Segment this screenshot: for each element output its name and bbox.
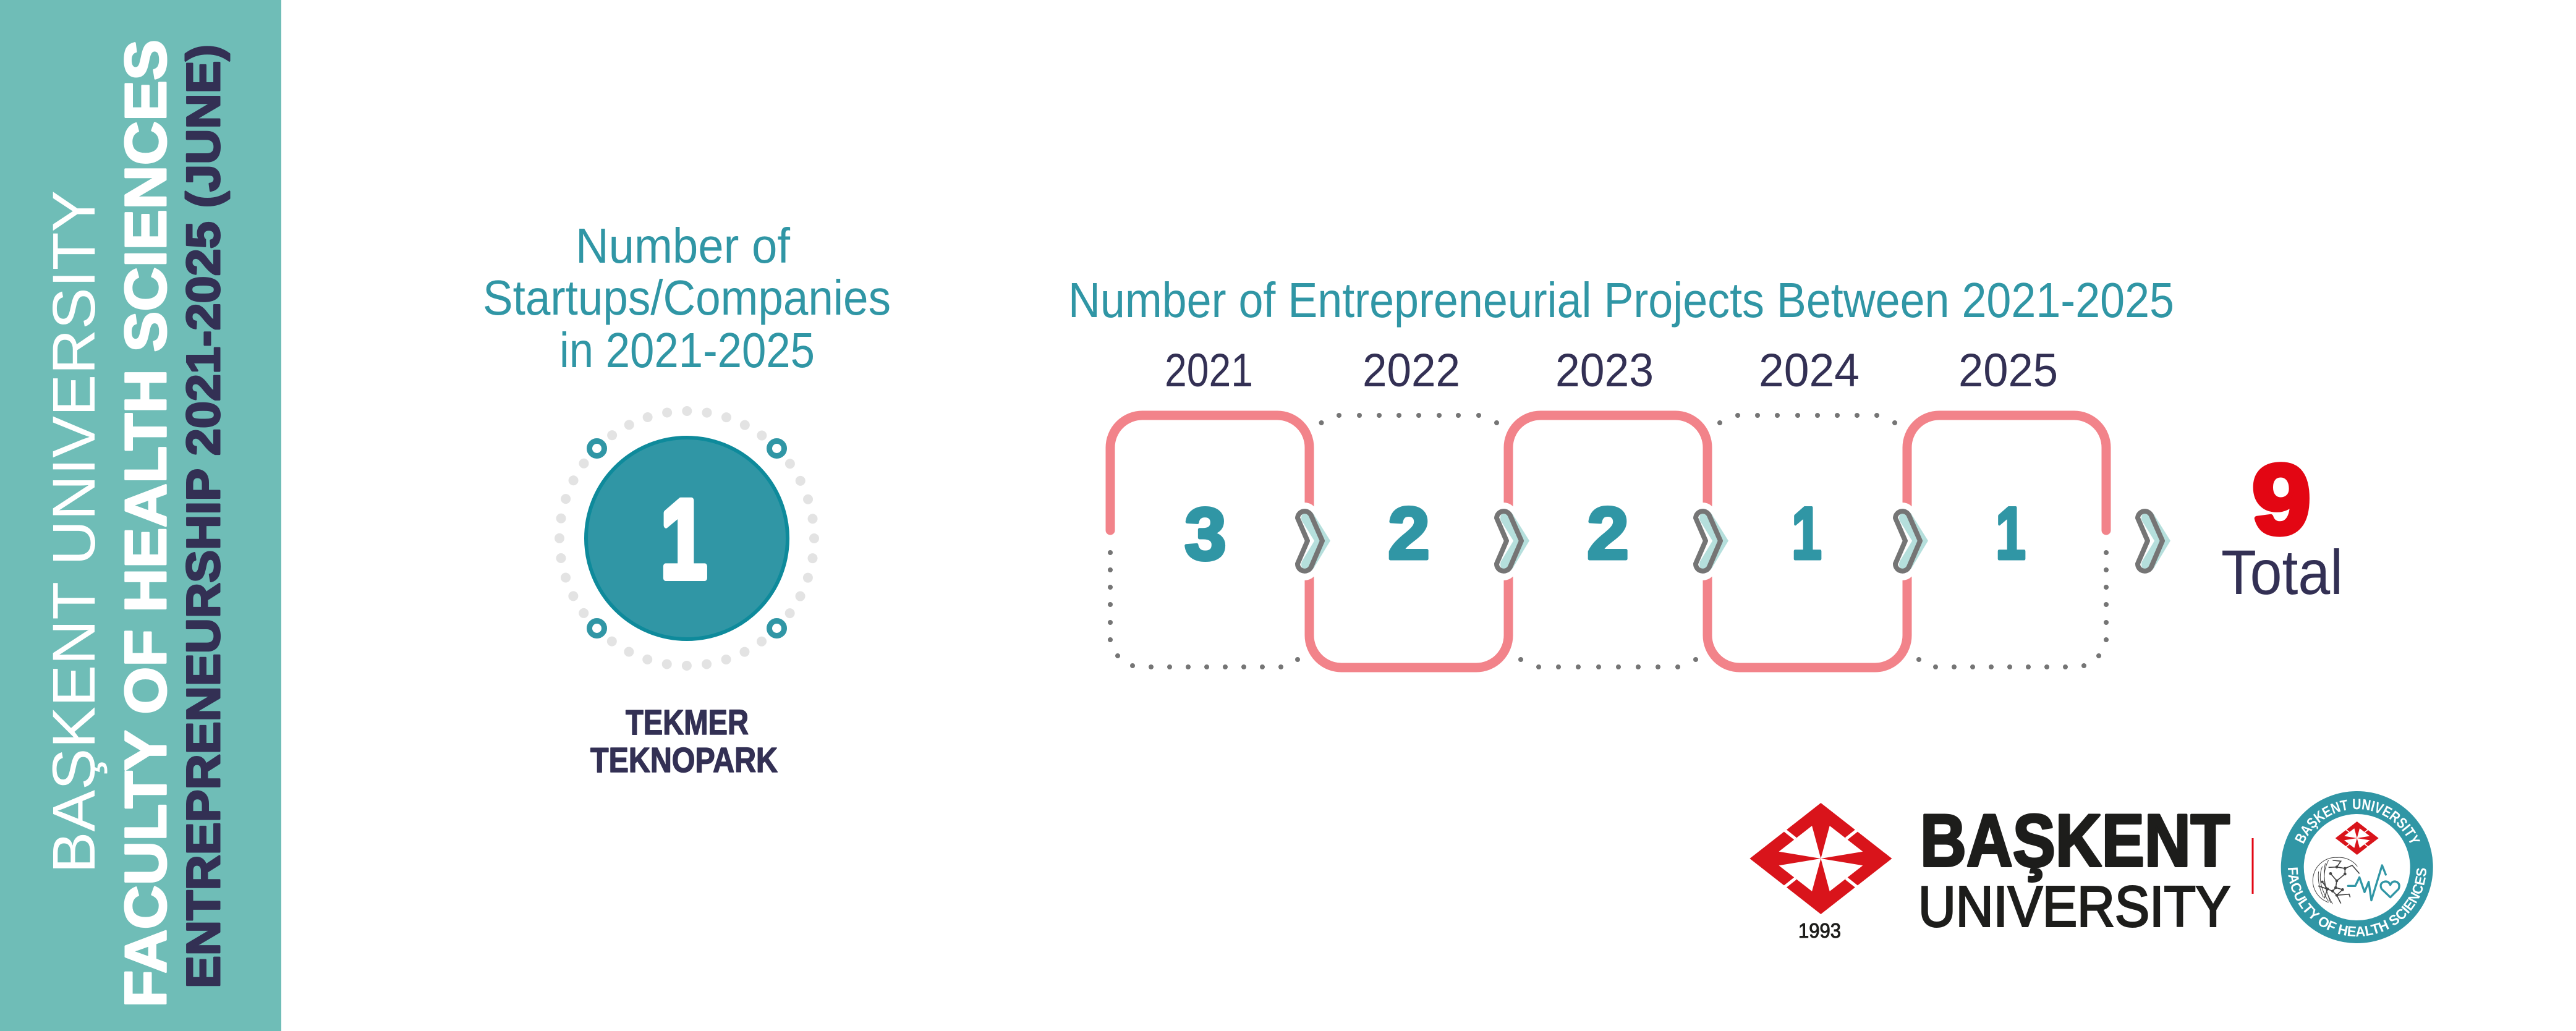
logo wordmark: baskent: BAŞKENT <box>1920 799 2230 882</box>
label: tekmer teknopark: TEKMER <box>626 703 749 742</box>
sidebar title: entrepreneurship: ENTREPRENEURSHIP 2021-2025 (JUNE) <box>177 45 230 988</box>
seal heartbeat and heart <box>2348 865 2399 901</box>
dotted connector <box>1110 415 2106 667</box>
startup count: 1 <box>660 476 707 602</box>
panel: sidebar <box>0 0 281 1031</box>
yearly counts <box>1184 492 2026 575</box>
seal emblem diamond <box>2336 821 2379 855</box>
year labels <box>1165 344 2058 397</box>
icon: red diamond emblem <box>1749 803 1892 914</box>
arrow: 2023 to 2024 <box>1696 511 1720 571</box>
sidebar title: university: BAŞKENT UNIVERSITY <box>40 190 108 873</box>
heading: entrepreneurial projects: Number of Entrepreneurial Projects Between 2021-2025 <box>1068 273 2174 328</box>
yearly counts: 3 <box>1184 493 1226 575</box>
arrow: 2024 to 2025 <box>1895 511 1920 571</box>
heading: number of startups <box>483 218 891 378</box>
logo wordmark: university: UNIVERSITY <box>1918 874 2230 938</box>
panel: entrepreneurial projects timeline <box>1068 273 2343 668</box>
yearly counts: 1 <box>1792 492 1822 575</box>
year labels: 2022 <box>1362 344 1460 397</box>
total label: Total <box>2221 537 2343 608</box>
year labels: 2024 <box>1759 344 1860 397</box>
seal text bottom: FACULTY OF HEALTH SCIENCES <box>2287 868 2426 937</box>
dotted ring <box>559 411 814 666</box>
logo separator <box>2251 838 2254 894</box>
yearly counts: 2 <box>1388 492 1430 575</box>
sidebar title: faculty: FACULTY OF HEALTH SCIENCES <box>113 40 179 1008</box>
main circle <box>586 438 788 639</box>
seal ring <box>2292 802 2421 932</box>
year labels: 2021 <box>1165 344 1253 397</box>
yearly counts: 1 <box>1996 492 2026 575</box>
seal text top: BAŞKENT UNIVERSITY <box>2295 799 2421 844</box>
logo year: 1993 <box>1798 919 1841 942</box>
label: tekmer teknopark <box>590 703 778 780</box>
yearly counts: 2 <box>1587 492 1629 575</box>
seal globe circuit <box>2313 857 2360 904</box>
panel: startups and companies <box>483 218 891 780</box>
heading: number of startups: Number of <box>576 218 791 273</box>
logo: faculty seal <box>2281 791 2433 943</box>
heading: number of startups: Startups/Companies <box>483 270 891 325</box>
logo: baskent university <box>1749 799 2230 942</box>
year labels: 2023 <box>1555 344 1654 397</box>
label: tekmer teknopark: TEKNOPARK <box>590 740 778 780</box>
small ring markers <box>590 441 784 635</box>
heading: number of startups: in 2021-2025 <box>559 323 815 378</box>
pink serpentine line <box>1110 415 2106 668</box>
year labels: 2025 <box>1958 344 2058 397</box>
arrow: 2021 to 2022 <box>1298 511 1322 571</box>
total number: 9 <box>2252 444 2311 554</box>
arrow: 2022 to 2023 <box>1497 511 1521 571</box>
arrow: 2025 to total <box>2138 511 2162 571</box>
